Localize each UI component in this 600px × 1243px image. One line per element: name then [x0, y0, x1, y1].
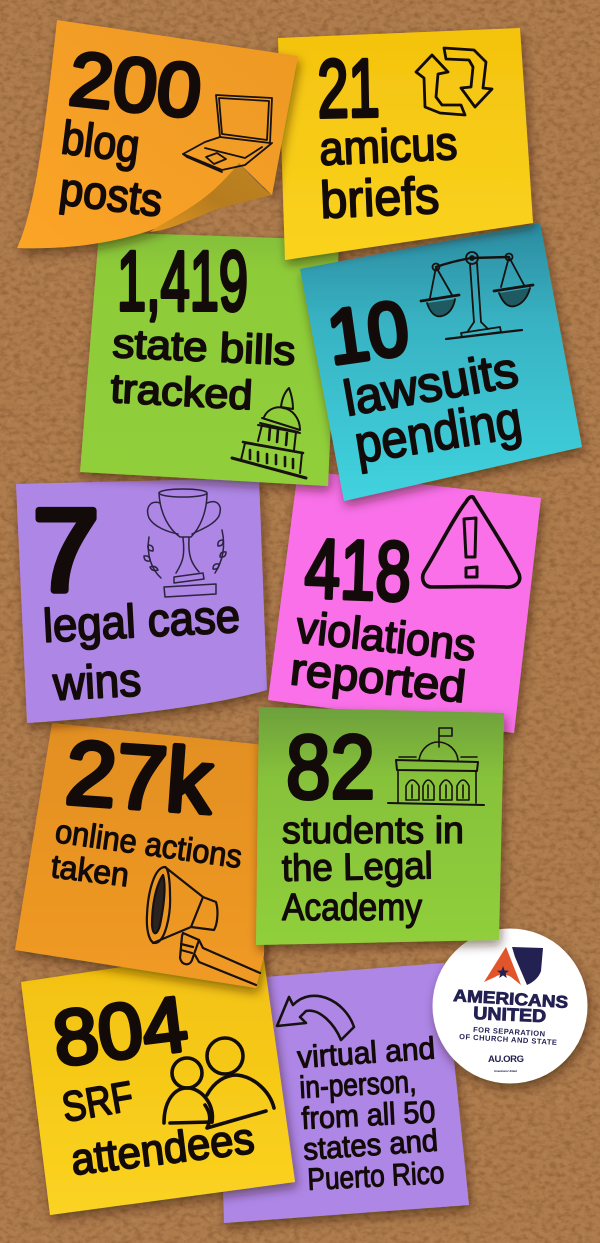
text: amicus: amicus — [318, 116, 458, 175]
text: taken: taken — [49, 847, 131, 893]
panel: online actions note — [15, 723, 265, 988]
text: Puerto Rico: Puerto Rico — [307, 1155, 445, 1197]
text: posts: posts — [57, 162, 165, 226]
number: 10: 10 — [323, 286, 414, 381]
logo text: Americans: AMERICANS — [453, 986, 569, 1012]
text: tracked: tracked — [110, 365, 254, 418]
icon: trophy — [144, 489, 226, 597]
icon: curved arrow — [277, 996, 354, 1040]
text: online actions: online actions — [53, 812, 244, 875]
text: pending: pending — [351, 390, 526, 475]
number: 82: 82 — [286, 718, 375, 818]
text: SRF: SRF — [58, 1072, 136, 1131]
text: states and: states and — [302, 1123, 439, 1167]
logo text: for separation: FOR SEPARATION — [473, 1025, 545, 1038]
text: virtual and: virtual and — [296, 1030, 436, 1075]
text: attendees: attendees — [68, 1114, 257, 1185]
icon: warning triangle — [423, 497, 520, 587]
number: 21: 21 — [317, 43, 380, 135]
number: 7: 7 — [33, 485, 99, 615]
icon: courthouse building — [388, 728, 484, 805]
text: briefs: briefs — [319, 167, 440, 230]
text: reported: reported — [288, 643, 468, 712]
number: 200: 200 — [65, 36, 205, 135]
text: students in: students in — [282, 810, 464, 852]
text: from all 50: from all 50 — [301, 1094, 436, 1136]
panel: students in the legal academy note — [256, 707, 504, 945]
icon: repeat arrows — [416, 48, 492, 115]
panel: violations reported note — [268, 470, 541, 733]
text: in-person: in-person, — [299, 1064, 417, 1105]
panel: legal case wins note — [16, 478, 267, 723]
text: state bills: state bills — [112, 320, 296, 374]
icon: people — [164, 1038, 274, 1128]
text: legal case: legal case — [42, 589, 241, 652]
panel: virtual and in-person note — [222, 963, 469, 1223]
logo text: of church and state: OF CHURCH AND STATE — [459, 1032, 557, 1047]
logo mark — [484, 947, 543, 985]
logo: Americans United badge — [432, 928, 588, 1084]
number: 27k: 27k — [63, 723, 216, 833]
panel: amicus briefs note — [278, 28, 533, 260]
text: the Legal: the Legal — [281, 845, 433, 890]
logo fine print: Americans United — [494, 1069, 517, 1073]
number: 804: 804 — [48, 979, 192, 1083]
logo text: United: UNITED — [473, 1003, 547, 1026]
text: violations: violations — [294, 601, 478, 671]
icon: scales of justice — [421, 252, 533, 339]
number: 1,419: 1,419 — [117, 234, 248, 328]
page curl — [150, 163, 272, 232]
text: lawsuits: lawsuits — [339, 341, 522, 427]
icon: capitol dome — [232, 388, 306, 478]
text: Academy: Academy — [282, 887, 422, 929]
panel: state bills note — [80, 232, 339, 486]
panel: blog posts note — [17, 20, 298, 248]
number: 418: 418 — [303, 521, 413, 619]
icon: megaphone — [147, 867, 260, 985]
panel: lawsuits pending note — [300, 223, 582, 501]
icon: laptop — [183, 95, 272, 172]
text: blog: blog — [59, 110, 143, 172]
text: wins: wins — [51, 652, 142, 710]
logo text: au.org: AU.ORG — [488, 1054, 524, 1065]
panel: SRF attendees note — [21, 946, 295, 1215]
